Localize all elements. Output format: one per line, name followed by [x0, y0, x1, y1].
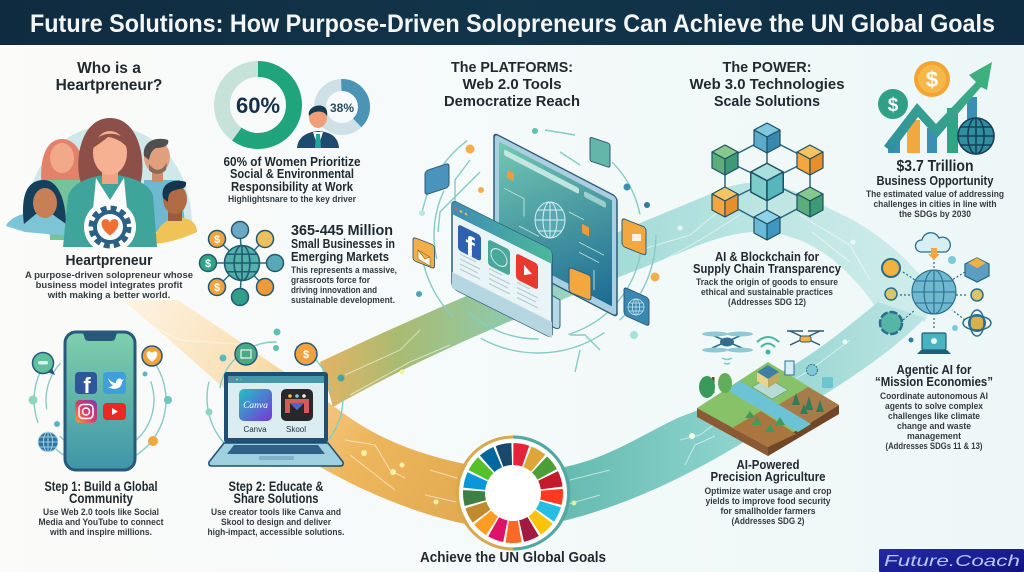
- text: agentic AI description: (Addresses SDGs 11 & 13): [886, 441, 982, 452]
- heading: agentic AI: “Mission Economies”: [875, 374, 993, 389]
- icon: globe network: $: [205, 258, 211, 270]
- chart: 60 percent donut: [222, 69, 294, 141]
- illustration: phone with social apps: [28, 332, 172, 470]
- panel: 60 percent statistic: [222, 69, 364, 205]
- heading: the platforms: The PLATFORMS:: [451, 59, 573, 76]
- text: business opportunity description: the SDGs by 2030: [899, 209, 971, 220]
- illustration: phone with social apps: f: [83, 373, 91, 398]
- heading: agentic AI: Agentic AI for: [896, 362, 972, 377]
- heading: small businesses: 365-445 Million: [291, 223, 393, 239]
- text: business opportunity description: The estimated value of addressing: [866, 189, 1004, 200]
- illustration: group of people with heart gear: [6, 118, 197, 253]
- chart: 60 percent donut: 60%: [236, 93, 280, 118]
- illustration: growth chart with coins: [878, 61, 994, 154]
- text: 60 percent heading: Responsibility at Work: [231, 180, 353, 194]
- panel: the platforms: [391, 59, 685, 382]
- ribbon: upper teal path through platforms to agentic AI: [320, 183, 935, 407]
- text: precision agriculture description: yields to improve food security: [706, 496, 831, 507]
- illustration: blockchain cubes: [712, 123, 823, 240]
- heading: 3.7 trillion business opportunity: $3.7 Trillion: [896, 158, 974, 175]
- heading: step 1: Community: [69, 491, 133, 506]
- label: heartpreneur: Heartpreneur: [66, 252, 153, 269]
- heading: small businesses: Small Businesses in: [291, 237, 395, 251]
- chart: 38 percent donut: [320, 85, 364, 129]
- title bar: [0, 0, 1024, 45]
- text: agentic AI description: agents to solve complex: [885, 401, 984, 412]
- panel: small businesses: [200, 222, 397, 306]
- heading: the power: Web 3.0 Technologies: [690, 76, 844, 93]
- heading: step 2: Step 2: Educate &: [228, 479, 324, 494]
- text: heartpreneur description: business model integrates profit: [36, 280, 183, 291]
- illustration: laptop with canva and skool: Canva: [243, 425, 267, 434]
- text: ai and blockchain description: (Addresses SDG 12): [728, 297, 806, 308]
- text: precision agriculture description: Optimize water usage and crop: [704, 486, 832, 497]
- text: precision agriculture description: (Addresses SDG 2): [732, 516, 804, 527]
- heading: step 1: Step 1: Build a Global: [44, 479, 158, 494]
- text: agentic AI description: challenges like climate: [888, 411, 980, 422]
- heading: who is a heartpreneur: Heartpreneur?: [56, 77, 162, 94]
- heading: precision agriculture: AI-Powered: [736, 457, 800, 472]
- panel: achieve the UN global goals: [420, 437, 606, 566]
- heading: who is a heartpreneur: Who is a: [77, 60, 141, 77]
- text: agentic AI description: management: [907, 431, 962, 442]
- heading: the power: Scale Solutions: [714, 93, 820, 110]
- text: ai and blockchain description: ethical and sustainable practices: [701, 287, 833, 298]
- text: small businesses description: sustainable development.: [291, 295, 395, 306]
- logo: future coach: [879, 549, 1024, 572]
- text: heartpreneur description: A purpose-driven solopreneur whose: [25, 270, 193, 281]
- illustration: monitor and tablet with web icons: [391, 88, 685, 382]
- text: agentic AI description: Coordinate autonomous AI: [880, 391, 988, 402]
- text: step 1 description: Media and YouTube to connect: [38, 517, 164, 528]
- illustration: drones over farm plot: [697, 331, 839, 456]
- text: agentic AI description: change and waste: [897, 421, 971, 432]
- illustration: growth chart with coins: $: [926, 67, 938, 92]
- illustration: agent network around globe: [880, 233, 991, 354]
- heading: the power: The POWER:: [722, 59, 812, 76]
- ribbon: orange path from heartpreneur to global goals: [122, 300, 470, 525]
- heading: 3.7 trillion business opportunity: Business Opportunity: [876, 174, 994, 188]
- text: step 2 description: Use creator tools like Canva and: [211, 507, 341, 518]
- text: step 2 description: Skool to design and deliver: [221, 517, 331, 528]
- panel: agentic AI: [875, 233, 993, 452]
- panel: the power: [690, 59, 844, 308]
- text: small businesses description: grassroots force for: [291, 275, 370, 286]
- illustration: laptop with canva and skool: Canva: [243, 401, 268, 411]
- text: small businesses description: This represents a massive,: [291, 265, 397, 276]
- text: heartpreneur description: with making a better world.: [47, 290, 170, 301]
- panel: step 2: [206, 328, 344, 538]
- heading: small businesses: Emerging Markets: [291, 250, 389, 264]
- illustration: monitor and tablet with web icons: f: [465, 229, 475, 265]
- panel: precision agriculture: [697, 331, 839, 527]
- icon: businessman: [297, 105, 339, 148]
- heading: step 2: Share Solutions: [234, 491, 318, 506]
- chart: SDG colour wheel: [457, 437, 569, 549]
- illustration: laptop with canva and skool: $: [303, 349, 309, 361]
- text: small businesses description: driving innovation and: [291, 285, 377, 296]
- text: business opportunity description: challenges in cities in line with: [874, 199, 997, 210]
- chart: 38 percent donut: 38%: [330, 101, 354, 115]
- illustration: laptop with canva and skool: Skool: [286, 425, 306, 434]
- illustration: growth chart with coins: $: [888, 95, 899, 116]
- icon: globe network: [200, 222, 284, 306]
- text: step 2 description: high-impact, accessible solutions.: [208, 527, 344, 538]
- text: 60 percent heading: 60% of Women Prioritize: [224, 155, 361, 169]
- text: 60 percent heading: Social & Environmental: [230, 167, 354, 181]
- text: 60 percent note: Highlightsnare to the key driver: [228, 194, 356, 205]
- heading: ai and blockchain: AI & Blockchain for: [715, 249, 819, 264]
- heading: ai and blockchain: Supply Chain Transparency: [693, 261, 842, 276]
- text: step 1 description: Use Web 2.0 tools like Social: [43, 507, 159, 518]
- heading: the platforms: Democratize Reach: [444, 93, 580, 110]
- panel: step 1: [28, 332, 172, 538]
- icon: globe network: $: [214, 234, 220, 246]
- panel: who is a heartpreneur: [6, 60, 197, 301]
- heading: the platforms: Web 2.0 Tools: [462, 76, 562, 93]
- illustration: laptop with canva and skool: [206, 328, 344, 466]
- icon: globe network: $: [214, 282, 220, 294]
- text: ai and blockchain description: Track the origin of goods to ensure: [696, 277, 838, 288]
- ribbon: lower teal path from agentic AI to global goals: [545, 302, 925, 525]
- logo: future coach: Future.Coach: [884, 553, 1020, 570]
- panel: business opportunity: [866, 61, 1004, 220]
- text: step 1 description: with and inspire millions.: [49, 527, 152, 538]
- text: precision agriculture description: for smallholder farmers: [720, 506, 816, 517]
- heading: achieve the UN global goals: Achieve the UN Global Goals: [420, 550, 606, 566]
- heading: precision agriculture: Precision Agriculture: [710, 469, 826, 484]
